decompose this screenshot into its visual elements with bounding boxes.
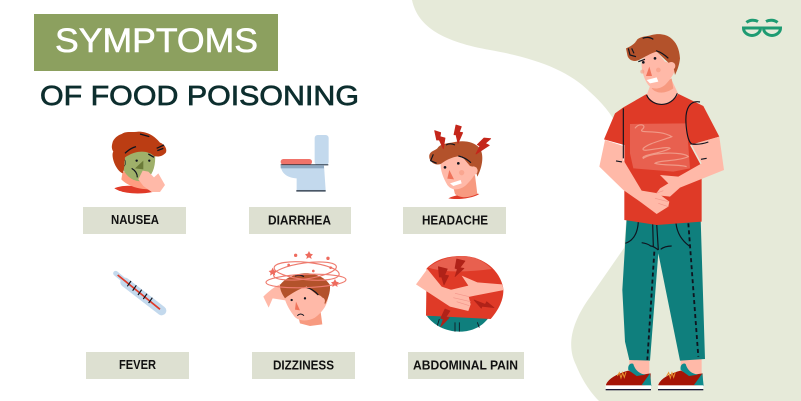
label: abdominal pain: ABDOMINAL PAIN <box>413 358 518 372</box>
left arm <box>599 140 669 214</box>
logo <box>744 20 780 36</box>
icon: abdominal pain <box>416 256 504 332</box>
label: headache <box>403 207 506 234</box>
label: headache: HEADACHE <box>422 214 488 228</box>
title banner <box>34 14 278 71</box>
main figure: torso and head <box>599 34 724 225</box>
icon: headache <box>429 125 491 199</box>
label: fever: FEVER <box>119 358 156 372</box>
icon: thermometer <box>116 273 162 311</box>
label: dizziness <box>252 352 355 379</box>
label: diarrhea: DIARRHEA <box>268 214 331 228</box>
main figure: legs <box>606 218 705 390</box>
label: abdominal pain <box>408 352 524 379</box>
icon: nausea <box>112 132 166 193</box>
background blob <box>412 0 801 401</box>
title banner: SYMPTOMS <box>55 22 258 60</box>
icon: toilet <box>281 135 329 192</box>
right shoe <box>658 364 704 390</box>
label: diarrhea <box>249 207 351 234</box>
label: fever <box>86 352 189 379</box>
label: dizziness: DIZZINESS <box>273 358 334 372</box>
right arm <box>655 137 724 197</box>
icon: dizziness <box>263 251 346 326</box>
subtitle: OF FOOD POISONING <box>40 80 359 111</box>
label: nausea: NAUSEA <box>111 213 159 227</box>
label: nausea <box>83 207 186 234</box>
left shoe <box>606 364 651 390</box>
